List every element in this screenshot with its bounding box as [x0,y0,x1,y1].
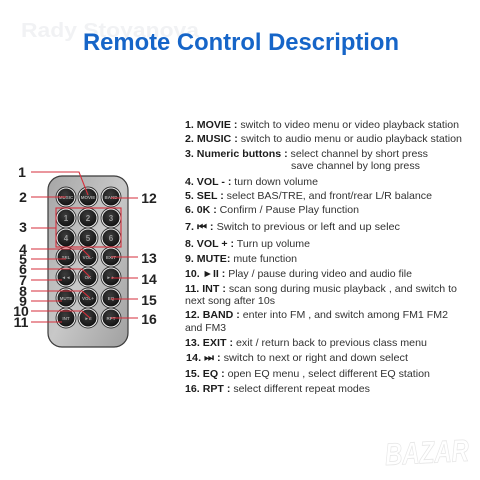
button captions: MUSIC [59,195,74,200]
function descriptions list: 4. VOL - : turn down volume [185,176,318,188]
button captions: RPT [106,316,116,321]
function descriptions list: 8. VOL + : Turn up volume [185,238,310,250]
function descriptions list: 16. RPT : select different repeat modes [185,383,370,395]
red callout lines [31,172,138,322]
function descriptions list: 9. MUTE: mute function [185,253,297,265]
function descriptions list: 6. 0K : Confirm / Pause Play function [185,204,359,216]
function descriptions list [185,119,462,395]
callout numbers: 9 [19,293,27,309]
function descriptions list: 5. SEL : select BAS/TRE, and front/rear L/R balance [185,190,432,202]
callout numbers: 16 [141,311,157,327]
function descriptions list: 2. MUSIC : switch to audio menu or audio playback station [185,133,462,145]
callout numbers: 10 [13,303,29,319]
callout numbers: 13 [141,250,157,266]
callout numbers: 6 [19,261,27,277]
callout numbers: 12 [141,190,157,206]
callout numbers [13,164,157,330]
callout numbers: 4 [19,241,27,257]
button captions: ◄◄ [62,275,70,280]
button captions: 2 [86,214,91,223]
watermark: author name: Rady Stoyanova [21,20,200,42]
button captions: VOL- [83,255,94,260]
button captions: EXIT [106,255,116,260]
function descriptions list: 12. BAND : enter into FM , and switch among FM1 FM2 [185,309,448,321]
function descriptions list: 10. ►II : Play / pause during video and audio file [185,268,412,280]
button captions: 4 [64,234,69,243]
button captions: OK [85,275,92,280]
callout numbers: 8 [19,283,27,299]
remote buttons [56,187,121,328]
callout numbers: 5 [19,251,27,267]
button captions: INT [62,316,70,321]
button captions: BAND [104,195,118,200]
button captions: MUTE [60,296,72,301]
button captions: MOVIE [81,195,95,200]
callout numbers: 2 [19,189,27,205]
button captions: 6 [109,234,114,243]
function descriptions list: 1. MOVIE : switch to video menu or video playback station [185,119,459,131]
button captions: 3 [109,214,114,223]
button captions: ►II [85,316,91,321]
remote body [48,176,128,347]
function descriptions list: 7. ⏮ : Switch to previous or left and up selec [185,221,400,233]
button captions: VOL+ [82,296,94,301]
remote control diagram [13,164,157,347]
function descriptions list: save channel by long press [291,160,420,172]
function descriptions list: 13. EXIT : exit / return back to previous class menu [185,337,427,349]
function descriptions list: 15. EQ : open EQ menu , select different EQ station [185,368,430,380]
function descriptions list: 3. Numeric buttons : select channel by short press [185,148,428,160]
callout numbers: 7 [19,272,27,288]
button captions: SEL [62,255,71,260]
callout numbers: 3 [19,219,27,235]
button captions: 5 [86,234,91,243]
callout numbers: 1 [18,164,26,180]
function descriptions list: and FM3 [185,322,226,334]
button captions [59,195,118,321]
button captions: EQ [108,296,115,301]
title: Remote Control Description [83,29,399,56]
callout numbers: 11 [14,314,29,330]
function descriptions list: 11. INT : scan song during music playback , and switch to [185,283,457,295]
callout numbers: 14 [141,271,157,287]
button captions: 1 [64,214,69,223]
function descriptions list: next song after 10s [185,295,275,307]
function descriptions list: 14. ⏭ : switch to next or right and down select [186,352,408,364]
button captions: ►► [107,275,115,280]
callout numbers: 15 [141,292,157,308]
